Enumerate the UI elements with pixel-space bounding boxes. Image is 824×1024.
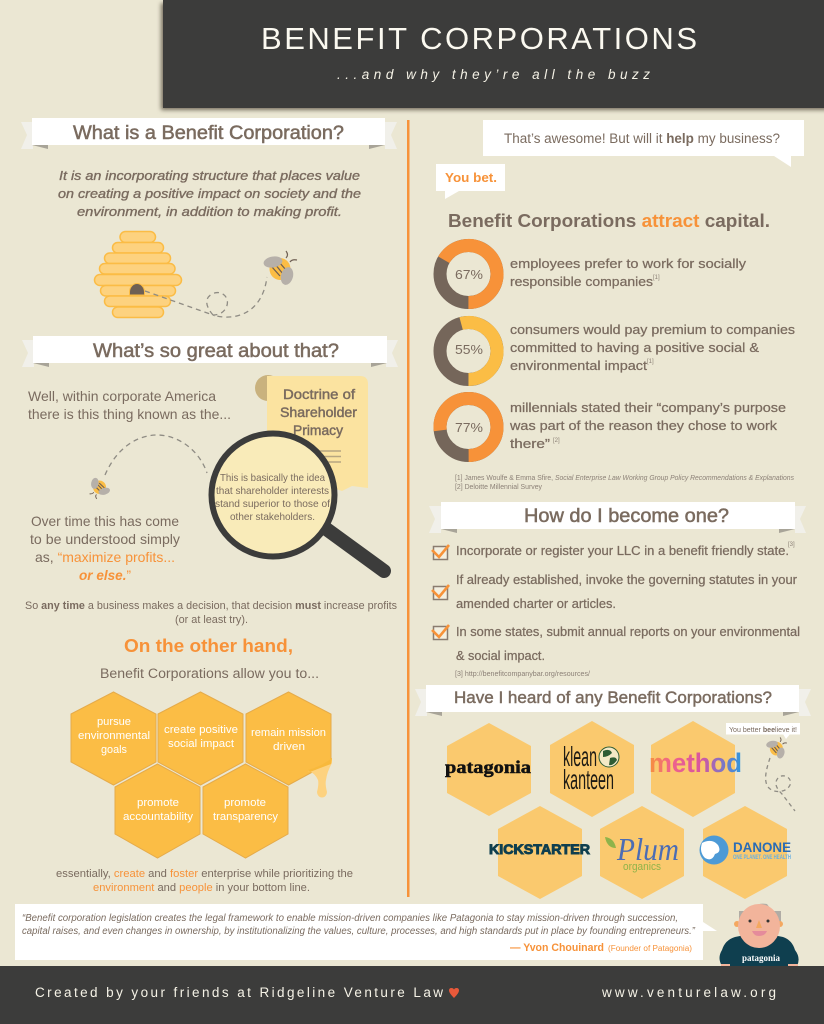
step 1: [3] (788, 542, 795, 548)
text: any time: (or at least try). (175, 614, 248, 626)
honeycomb: benefits (71, 692, 331, 858)
flight path: bee to magnifier (105, 435, 207, 475)
honeycomb: benefits: promote (224, 797, 266, 809)
icon: magnifying glass: that shareholder interests (216, 485, 329, 497)
logo: danone (700, 836, 791, 864)
honeycomb: benefits: environmental (78, 730, 150, 742)
step 2: amended charter or articles. (456, 597, 616, 611)
heading ribbon: How do I become one? (429, 502, 806, 533)
footnotes: stats (455, 475, 794, 491)
stat text: employees (510, 256, 747, 289)
logo hexagons (447, 721, 787, 899)
document: Doctrine of Shareholder Primacy: Primacy (293, 423, 343, 438)
stat text: millennials (509, 400, 786, 451)
heading ribbon: What is a Benefit Corporation? (21, 118, 397, 149)
icon: magnifying glass: This is basically the idea (220, 472, 325, 484)
stat text: consumers: environmental impact (510, 358, 647, 373)
heading ribbon: Have I heard (415, 685, 811, 716)
quote bubble: capital raises, and even changes in ownership, by institutionalizing the values, culture, processes, and high standards put in place by founding entrepreneurs.” (22, 926, 696, 937)
checklist (432, 542, 800, 663)
title: BENEFIT CORPORATIONS (261, 21, 697, 56)
logo: danone: DANONE (733, 839, 791, 855)
stat text: consumers: consumers would pay premium to companies (510, 322, 796, 337)
honeycomb: benefits: pursue (97, 716, 131, 728)
logo: plum organics: Plum (616, 831, 679, 867)
divider (407, 120, 410, 897)
document: Doctrine of Shareholder Primacy: Doctrine of (283, 387, 355, 402)
text: over time (30, 513, 180, 583)
definition text: on creating a positive impact on society and the (58, 186, 361, 201)
logo: kickstarter: KICKSTARTER (489, 842, 590, 857)
subtitle: ...and why they’re all the buzz (337, 67, 650, 82)
stat text: millennials: millennials stated their “company’s purpose (510, 400, 786, 415)
definition text (58, 168, 361, 219)
donut: 55%: 55% (455, 342, 483, 357)
icon: bee small (88, 476, 111, 499)
heading ribbon: What's so great about that? (22, 336, 398, 367)
step 3 (432, 625, 800, 663)
honeycomb: benefits: goals (101, 744, 127, 756)
speech bubble: beelieve (726, 723, 800, 739)
logo: danone: ONE PLANET. ONE HEALTH (733, 855, 791, 861)
donut: 77%: 77% (455, 420, 483, 435)
quote bubble: “Benefit corporation legislation creates the legal framework to enable mission-driven companies like Patagonia to stay mission-driven through succession, (22, 913, 678, 924)
honeycomb: benefits: create positive (164, 724, 238, 736)
stat text: employees: responsible companies (510, 274, 654, 289)
stat text: millennials: there” (510, 436, 550, 451)
text: essentially: environment and people in your bottom line. (93, 882, 310, 894)
text: any time: So any time a business makes a decision, that decision must increase profits (25, 600, 397, 612)
honeycomb: benefits: driven (273, 741, 305, 753)
speech bubble: will it help: That’s awesome! But will it help my business? (504, 131, 780, 146)
text: any time (25, 600, 397, 626)
logo: plum organics (605, 831, 679, 873)
honeycomb: benefits: social impact (168, 738, 234, 750)
step 3: & social impact. (456, 649, 545, 663)
speech bubble: beelieve: You better beelieve it! (729, 725, 797, 734)
definition text: It is an incorporating structure that places value (59, 168, 360, 183)
logo: method: method (649, 748, 742, 778)
speech bubble: you bet: You bet. (445, 170, 497, 185)
stat text: consumers (510, 322, 796, 373)
icon: magnifying glass: stand superior to those of (215, 498, 330, 510)
speech bubble: will it help (483, 120, 804, 167)
heading ribbon: What's so great about that?: What’s so great about that? (93, 341, 339, 362)
subheading: allow you to: Benefit Corporations allow you to... (100, 666, 319, 681)
icon: beehive (94, 232, 182, 318)
definition text: environment, in addition to making profit. (77, 204, 342, 219)
footnotes: stats: [1] James Woulfe & Emma Sfire, Social Enterprise Law Working Group Policy Recommendations & Explanations (455, 475, 794, 482)
stat text: employees: employees prefer to work for socially (510, 256, 747, 271)
text: over time: to be understood simply (30, 531, 180, 547)
step 2 (432, 573, 797, 611)
step 2: If already established, invoke the governing statutes in your (456, 573, 797, 587)
stat text: consumers: committed to having a positive social & (510, 340, 759, 355)
donut: 55% (434, 316, 503, 386)
icon: honey drip (308, 758, 332, 798)
donut: 67% (430, 235, 507, 313)
intro text (28, 388, 231, 422)
text: essentially: essentially, create and foster enterprise while prioritizing the (56, 868, 353, 880)
text: over time: or else.” (79, 567, 131, 583)
icon: heart (449, 988, 459, 998)
stat text: consumers: [1] (647, 359, 654, 365)
icon: magnifying glass (212, 434, 384, 571)
icon: magnifying glass: other stakeholders. (230, 511, 315, 523)
heading: attract capital: Benefit Corporations attract capital. (448, 211, 770, 231)
footer bar: Created by your friends at Ridgeline Venture Law (35, 985, 443, 1000)
logo: klean kanteen: kanteen (563, 764, 614, 795)
stat text: employees: [1] (653, 275, 660, 281)
honeycomb: benefits: accountability (123, 811, 194, 823)
text: over time: Over time this has come (31, 513, 179, 529)
footnotes: stats: [2] Deloitte Millennial Survey (455, 484, 542, 491)
footer bar (0, 966, 824, 1024)
quote bubble (15, 904, 717, 960)
honeycomb: benefits: remain mission (251, 727, 326, 739)
illustration: Yvon Chouinard: patagonia (742, 953, 780, 963)
icon: bee with loop path (766, 737, 795, 811)
heading: On the other hand: On the other hand, (124, 636, 293, 656)
icon: bee large (263, 251, 297, 286)
speech bubble: you bet (436, 164, 505, 199)
donut: 67%: 67% (455, 267, 483, 282)
honeycomb: benefits: promote (137, 797, 179, 809)
illustration: Yvon Chouinard (720, 904, 799, 966)
footnote: url: [3] http://benefitcompanybar.org/resources/ (455, 671, 590, 678)
intro text: Well, within corporate America (28, 388, 216, 404)
intro text: there is this thing known as the... (28, 406, 231, 422)
logo: plum organics: organics (623, 861, 661, 873)
header banner (161, 0, 824, 110)
text: over time: as, “maximize profits... (35, 549, 175, 565)
logo: klean kanteen: klean (563, 741, 597, 772)
document: Doctrine of Shareholder Primacy: Shareholder (280, 405, 358, 420)
heading ribbon: How do I become one?: How do I become one? (524, 506, 729, 527)
flight path: hive to bee (145, 277, 267, 317)
text: essentially (56, 868, 353, 894)
heading ribbon: What is a Benefit Corporation?: What is a Benefit Corporation? (73, 123, 344, 144)
stat text: millennials: [2] (553, 438, 560, 444)
footer bar: www.venturelaw.org (601, 985, 776, 1000)
honeycomb: benefits: transparency (213, 811, 279, 823)
logo: klean kanteen (563, 741, 619, 795)
donut: 77% (437, 395, 500, 459)
step 1: Incorporate or register your LLC in a benefit friendly state. (456, 544, 789, 558)
step 3: In some states, submit annual reports on your environmental (456, 625, 800, 639)
stat text: millennials: was part of the reason they chose to work (509, 418, 778, 433)
document: Doctrine of Shareholder Primacy (255, 375, 368, 491)
heading ribbon: Have I heard: Have I heard of any Benefit Corporations? (454, 688, 772, 707)
quote bubble: (Founder of Patagonia) (608, 944, 692, 953)
logo: patagonia: patagonia (445, 757, 531, 777)
quote bubble: — Yvon Chouinard (510, 942, 604, 954)
